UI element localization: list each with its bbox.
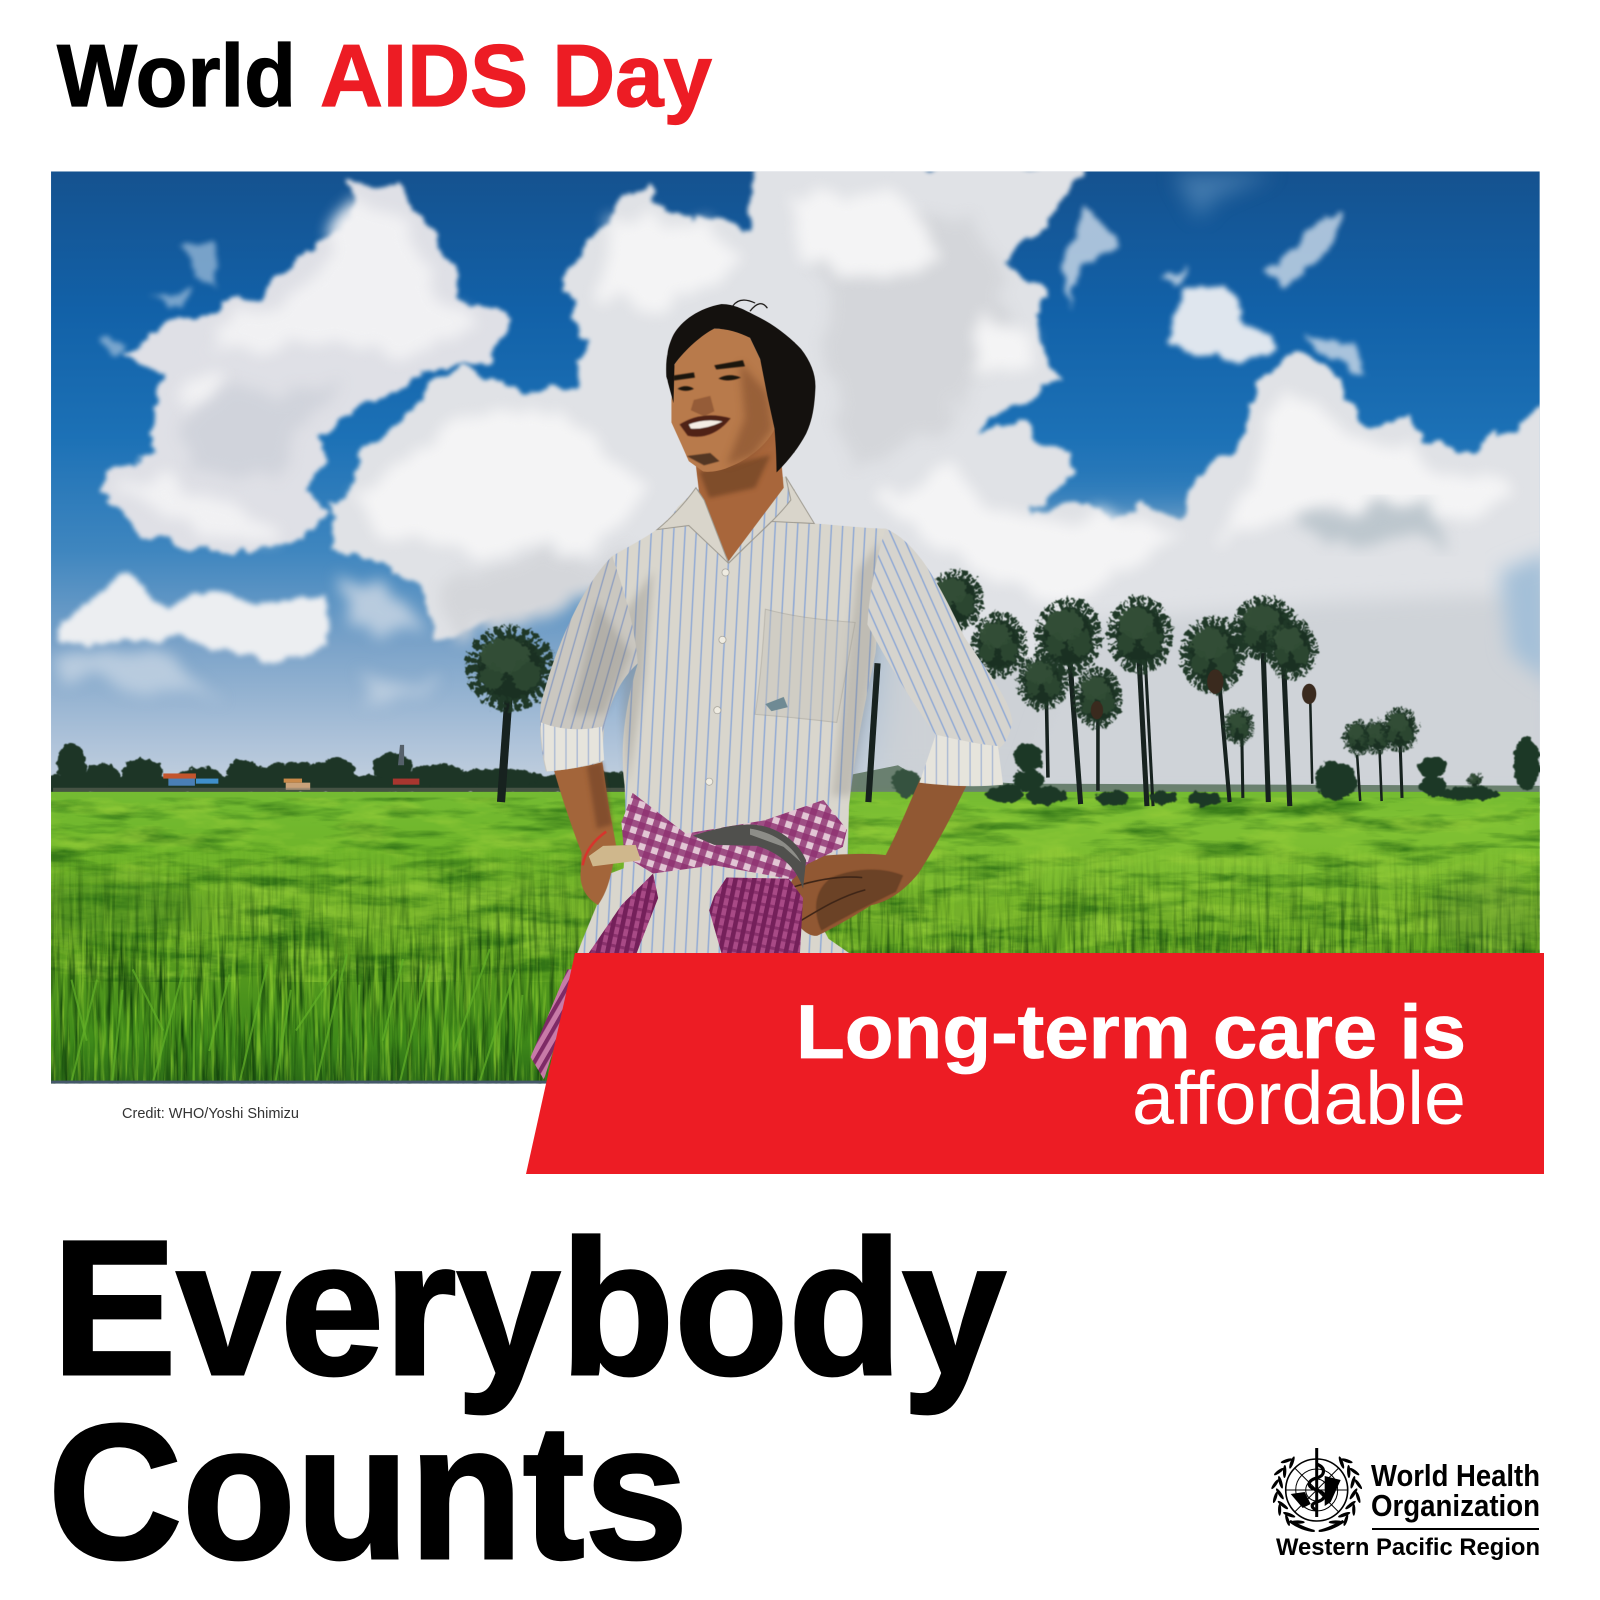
WHO logo [1270,1448,1540,1561]
lower shirt [577,857,852,955]
treeline left [47,743,639,794]
grass texture dark [51,837,1540,1084]
left sleeve shade [571,602,631,714]
grass texture light [51,837,1540,1084]
pocket emblem [765,697,788,711]
cloud: central bright areas [357,194,1520,602]
grass mottling light [51,798,1540,982]
clouds: faint low-left band [56,577,434,706]
shirt pocket [755,609,855,722]
sky: blue gap far right [1500,551,1551,684]
left sleeve [540,556,638,771]
bracelet [583,832,606,865]
palm trunks [501,653,1402,806]
hair [666,304,815,472]
clouds: thin streaks [1061,204,1367,372]
clouds: right upper wisps [1166,284,1273,362]
heading: Everybody Counts [48,1200,1006,1599]
photo bottom edge [51,1081,551,1084]
sickle handle [589,845,641,866]
clouds [56,163,1551,806]
photo: farmer in rice field [20,163,1551,1084]
title words: AIDS Day: AIDS Day [320,26,712,125]
cloud: right cumulus shadow [1296,505,1449,546]
left forearm shade [587,762,612,829]
sickle highlight [750,829,801,862]
cloud: central grey shading [439,214,1020,638]
eyebrows [673,360,745,381]
right forearm and hand [789,781,967,936]
shirt body [612,477,886,888]
photo credit: Credit: WHO/Yoshi Shimizu [122,1106,299,1122]
ear [781,391,801,431]
cloud: top left shadow [184,383,337,480]
teeth [689,420,722,429]
eyes [678,375,741,391]
right cuff [919,735,1003,786]
face [671,329,776,472]
cloud shadow base across right horizon [858,492,1188,783]
shirt shade right [832,541,880,796]
grass mottling dark [51,798,1540,982]
banner text: affordable: affordable [1132,1056,1466,1140]
red banner [526,953,1544,1174]
logo rule [1372,1528,1539,1530]
scarf band [621,793,847,880]
neck shade [699,455,770,498]
collar [657,477,814,563]
left cuff [541,722,604,771]
palm fruit clusters [1091,669,1316,719]
grass blades [71,949,522,1082]
face shade [727,362,772,465]
grass: bright lime band right [847,806,1541,888]
heading line: Counts: Counts [48,1384,688,1599]
cloud: top left [103,176,503,552]
moustache and mouth [680,415,731,437]
round trees right [892,737,1540,806]
banner shape [526,953,1544,1174]
right sleeve [867,529,1012,749]
logo text: World Health: World Health [1371,1458,1540,1493]
finger lines [791,877,865,922]
grass: dark left patch [20,878,204,939]
scarf strip left [589,873,658,953]
scarf hanging right [709,878,803,953]
clouds: top thin haze [1173,173,1276,219]
banner text: Long-term care is: Long-term care is [796,990,1466,1075]
houses left [53,745,635,792]
title word: World: World [57,26,296,125]
WHO emblem [1270,1448,1363,1532]
nose shadow [691,396,714,416]
neck [694,418,784,561]
scarf lower left below banner [531,969,580,1080]
distant treeline right [847,765,1540,806]
logo text: Organization: Organization [1371,1488,1540,1523]
heading line: Everybody: Everybody [52,1200,1006,1415]
grass field [51,792,1540,1084]
chin beard [687,453,719,465]
cloud: big central mass [330,163,1551,663]
man [531,300,1012,1080]
cloud: lower right grey [1092,594,1540,786]
sky [51,171,1540,804]
hand shade [816,870,903,931]
shirt shade left [622,571,653,786]
left forearm and hand [553,760,616,905]
sickle blade [693,824,806,889]
title: World AIDS Day [57,26,712,125]
face features [673,360,745,465]
stray hairs [733,300,767,311]
shirt buttons [706,569,729,785]
cloud: top left highlights [117,204,480,541]
cloud: small upper-left wisps [100,243,216,355]
grass: olive patch right [1429,874,1551,952]
cloud: mid-left pair [56,573,329,663]
logo text: Western Pacific Region: Western Pacific Region [1276,1534,1540,1561]
palm crowns [472,574,1481,787]
